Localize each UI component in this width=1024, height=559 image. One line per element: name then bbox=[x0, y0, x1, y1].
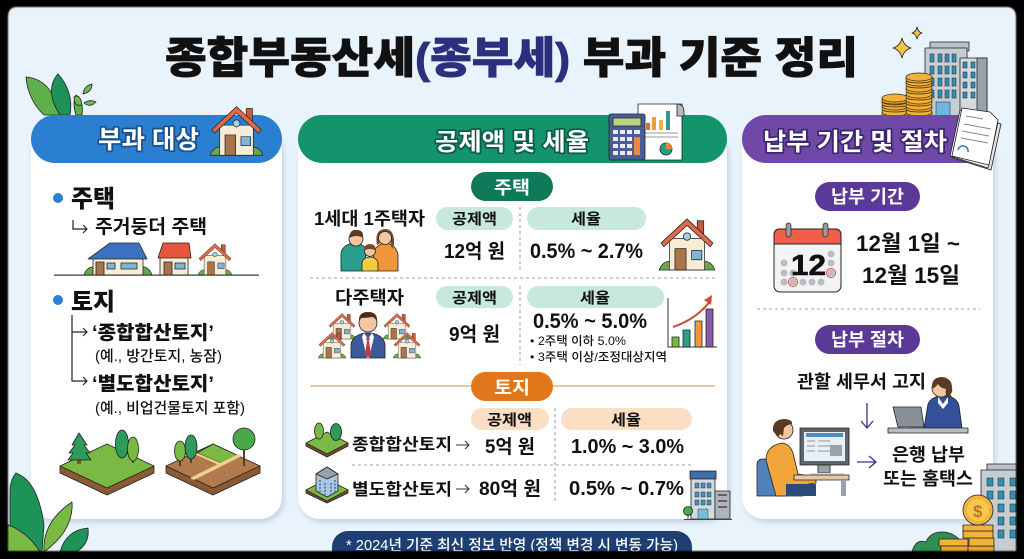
text: 관할 세무서 고지: 관할 세무서 고지 bbox=[797, 372, 926, 392]
text: 별도합산토지 example: (예., 비업건물토지 포함) bbox=[95, 400, 245, 417]
pill: 세율 bbox=[527, 286, 664, 308]
text: 종합합산토지: ‘종합합산토지’ bbox=[92, 322, 214, 344]
value: 1.0% ~ 3.0%: 1.0% ~ 3.0% bbox=[571, 436, 684, 458]
pill: 납부 절차: 납부 절차 bbox=[831, 330, 904, 350]
panel body bbox=[31, 130, 282, 519]
pill: 납부 기간 bbox=[815, 182, 920, 211]
icon: person at computer bbox=[757, 419, 849, 496]
pill: 공제액: 공제액 bbox=[452, 290, 497, 307]
heading: 공제액 및 세율 bbox=[435, 129, 589, 156]
dotted vertical divider bbox=[554, 408, 556, 504]
arrow bbox=[456, 441, 469, 449]
panel body bbox=[742, 130, 993, 519]
text: 종합합산토지 example: (예., 방간토지, 농잠) bbox=[95, 348, 222, 365]
pill: 세율: 세율 bbox=[580, 290, 610, 307]
dashed horizontal divider bbox=[310, 277, 715, 279]
section pill: 토지 bbox=[471, 372, 553, 401]
note: 2주택 이하: • 2주택 이하 5.0% bbox=[530, 334, 626, 348]
pill: 공제액 bbox=[436, 286, 513, 308]
panel body bbox=[298, 130, 727, 519]
pill: 납부 절차 bbox=[815, 325, 920, 354]
icon: grass land tile bbox=[60, 430, 154, 495]
arrow bbox=[456, 485, 469, 493]
icon: house bbox=[210, 107, 263, 155]
pill: 공제액: 공제액 bbox=[487, 412, 532, 429]
value: 0.5% ~ 0.7%: 0.5% ~ 0.7% bbox=[569, 478, 684, 500]
icon: tax officer bbox=[888, 377, 968, 433]
value: 5억 원: 5억 원 bbox=[485, 436, 535, 458]
icon: office building bbox=[684, 471, 732, 520]
text: 다주택자: 다주택자 bbox=[335, 288, 404, 308]
dotted row divider bbox=[352, 464, 692, 466]
arrow: right bbox=[857, 456, 876, 468]
icon: calendar: 12 bbox=[791, 250, 826, 282]
panel: 공제액 및 세율 bbox=[298, 104, 732, 520]
footer note: * 2024년 기준 최신 정보 반영 (정책 변경 시 변동 가능) bbox=[346, 537, 678, 554]
section pill: 토지: 토지 bbox=[494, 378, 530, 398]
orange divider bbox=[310, 385, 715, 387]
decoration: sparkles, coins and buildings top right bbox=[882, 27, 987, 118]
text: 1세대 1주택자: 1세대 1주택자 bbox=[314, 209, 425, 229]
icon: calculator and report bbox=[609, 104, 684, 160]
pill: 공제액 bbox=[436, 207, 513, 230]
pill: 세율 bbox=[527, 207, 646, 230]
arrow: down bbox=[861, 403, 873, 428]
panel header bbox=[298, 115, 727, 163]
decoration: building and coins bottom right: $ bbox=[973, 502, 983, 521]
text: 종합합산토지 row label: 종합합산토지 bbox=[352, 435, 452, 454]
pill: 납부 기간: 납부 기간 bbox=[831, 187, 904, 207]
text: 납부 기간 첫째 줄: 12월 1일 ~ bbox=[856, 231, 960, 256]
footer note bbox=[332, 531, 692, 559]
pill: 세율 bbox=[561, 408, 692, 430]
bar chart: rising tax bbox=[668, 295, 717, 347]
text: 은행 납부: 은행 납부 bbox=[892, 445, 965, 465]
section pill: 주택: 주택 bbox=[494, 178, 530, 198]
decoration: leaves bottom left bbox=[6, 473, 88, 552]
dotted vertical divider bbox=[519, 286, 521, 365]
heading: 납부 기간 및 절차 bbox=[763, 129, 947, 156]
decoration: building and coins bottom right bbox=[912, 464, 1019, 554]
connector arrows bbox=[72, 315, 87, 385]
bullet: 주택: 주택 bbox=[71, 186, 115, 213]
panel header bbox=[742, 115, 993, 163]
icon: row of houses bbox=[84, 243, 232, 275]
icon: calendar bbox=[774, 223, 841, 292]
dotted vertical divider bbox=[519, 207, 521, 270]
value: 9억 원: 9억 원 bbox=[449, 323, 500, 346]
text: 별도합산토지 row label: 별도합산토지 bbox=[352, 480, 452, 499]
value: 0.5% ~ 2.7%: 0.5% ~ 2.7% bbox=[530, 240, 643, 263]
panel: 납부 기간 및 절차 bbox=[742, 108, 1001, 519]
icon: documents bbox=[950, 108, 1001, 170]
value: 80억 원: 80억 원 bbox=[479, 478, 541, 500]
heading: 부과 대상 bbox=[98, 126, 199, 154]
note: 3주택 이상: • 3주택 이상/조정대상지역 bbox=[530, 350, 667, 364]
icon: farm land tile bbox=[166, 428, 260, 495]
value: 12억 원: 12억 원 bbox=[444, 240, 505, 263]
icon: small grass tile bbox=[306, 423, 348, 457]
divider line bbox=[54, 274, 259, 276]
pill: 공제액: 공제액 bbox=[452, 211, 497, 228]
title: 종합부동산세 (종부세) 부과 기준 정리 bbox=[165, 35, 858, 83]
text block: 주거둥더 주택: 주거둥더 주택 bbox=[95, 216, 207, 238]
text: 별도합산토지: ‘별도합산토지’ bbox=[92, 373, 214, 395]
value: 0.5% ~ 5.0%: 0.5% ~ 5.0% bbox=[533, 310, 647, 333]
panel: 부과 대상 bbox=[31, 107, 282, 519]
pill: 세율: 세율 bbox=[611, 412, 641, 429]
icon: landlord with houses bbox=[318, 312, 421, 358]
icon: building on tile bbox=[306, 467, 348, 503]
text: 또는 홈택스: 또는 홈택스 bbox=[883, 469, 973, 489]
text: 납부 기간 둘째 줄: 12월 15일 bbox=[862, 263, 960, 288]
panel header bbox=[31, 115, 282, 163]
decoration: leaves top left bbox=[26, 74, 96, 115]
icon: house bbox=[659, 219, 715, 270]
dashed divider bbox=[757, 308, 980, 310]
section pill: 주택 bbox=[471, 172, 553, 201]
icon: family bbox=[341, 229, 398, 271]
bullet: 토지: 토지 bbox=[71, 289, 115, 316]
pill: 세율: 세율 bbox=[571, 211, 601, 228]
pill: 공제액 bbox=[471, 408, 549, 430]
